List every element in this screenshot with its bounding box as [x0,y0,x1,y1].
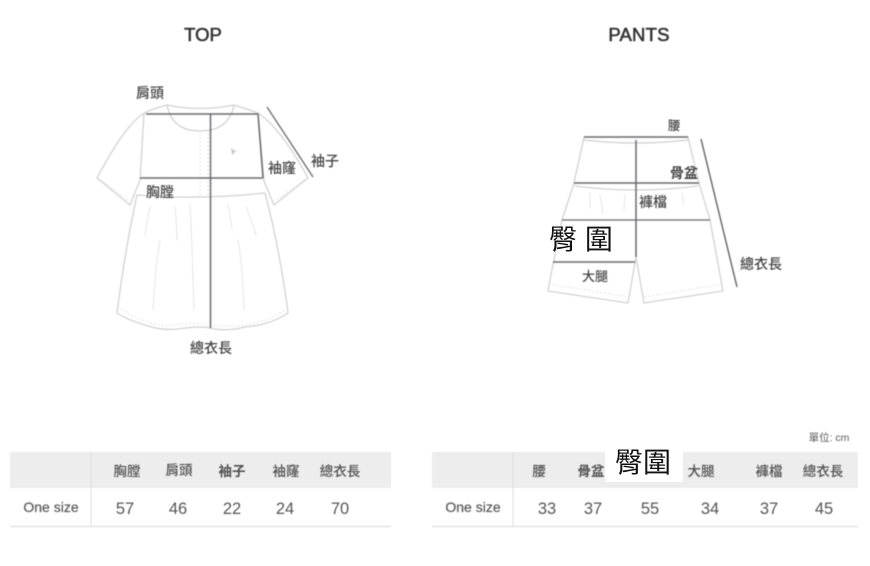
table: top sizes: 46 [169,500,187,518]
measure: center [635,140,637,257]
patch: white box behind hip header [605,448,683,482]
pants diagram [548,119,782,303]
measure: crotch [562,219,710,221]
title: PANTS: PANTS [608,24,670,45]
table: top sizes: One size [23,499,79,515]
label: sleeve: 袖子 [311,153,339,169]
top garment diagram [97,85,339,356]
table: top sizes: 袖窿 [272,463,300,479]
table: top sizes: 總衣長 [320,464,361,479]
label: chest: 胸膛 [146,184,174,200]
table: pants sizes: 34 [701,500,719,518]
table: top sizes: 袖子 [218,463,246,479]
label: rise: 褲檔 [639,194,667,210]
measure: shoulder [146,113,258,115]
header: hip (black): 臀圍 [615,447,671,478]
table: pants sizes: 37 [760,500,778,518]
measure: chest [140,177,263,179]
table: top sizes: 24 [276,500,294,518]
table: pants sizes: 33 [538,500,556,518]
table: top sizes: 胸膛 [114,464,140,479]
garment outline: shorts [548,137,723,303]
title: TOP: TOP [184,24,222,45]
table: pants sizes: One size [445,499,501,515]
measure: sleeve [267,107,313,177]
label: shoulder: 肩頭 [136,85,164,101]
label: waist: 腰 [668,119,680,133]
table: top sizes: 22 [223,500,241,518]
table: pants sizes: 45 [815,500,833,518]
label: hip (black): 臀 圍 [549,224,613,255]
measure: thigh [553,261,635,263]
table: pants sizes: 總衣長 [803,464,844,479]
table: top sizes: 70 [331,500,349,518]
measure: waist [584,136,688,138]
table: pants sizes: 大腿 [688,464,715,479]
table: pants sizes: 腰 [532,464,546,479]
table: top sizes: 57 [116,500,134,518]
garment outline: dress top [97,105,308,330]
table: pants sizes: 褲檔 [756,463,782,479]
measure: pants length [701,139,737,287]
label: pants length: 總衣長 [740,256,782,272]
label: pelvis: 骨盆 [670,165,698,181]
table: pants sizes: 37 [584,500,602,518]
measure: length [210,114,212,328]
label: armhole: 袖窿 [268,160,296,176]
table: top sizes [10,452,391,526]
measure: hip [574,182,699,184]
table: top sizes: 肩頭 [166,463,193,478]
unit note: 單位: cm [809,431,850,444]
label: thigh: 大腿 [582,269,608,284]
table: pants sizes: 骨盆 [578,463,605,479]
measure: armhole [258,114,263,178]
table: pants sizes: 55 [641,500,659,518]
table: pants sizes [432,452,858,526]
label: length: 總衣長 [190,340,232,356]
